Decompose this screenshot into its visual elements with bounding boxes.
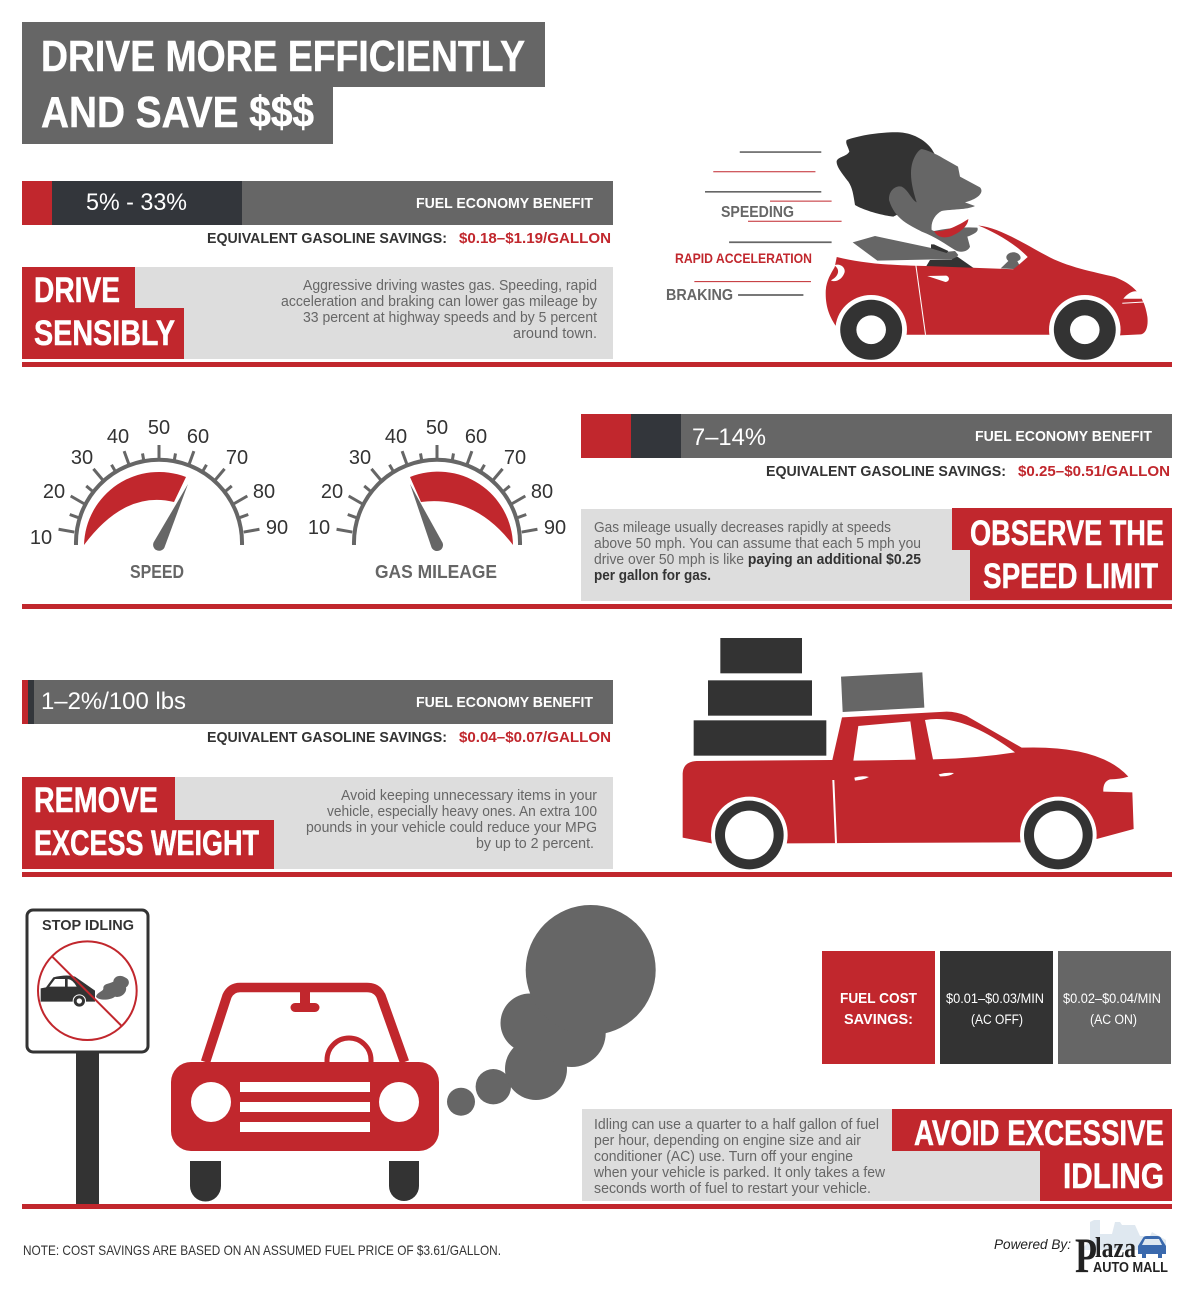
text panel: observe the speed limit: SPEED LIMIT	[983, 557, 1158, 596]
text panel: observe the speed limit: per gallon for gas.	[594, 568, 711, 584]
gasoline savings line: $0.18–$1.19/GALLON	[459, 230, 611, 247]
title: DRIVE MORE EFFICIENTLY	[41, 32, 525, 81]
windshield frame	[206, 988, 404, 1062]
chart: speed gauge: 40	[107, 426, 129, 448]
text panel: remove excess weight: vehicle, especially heavy ones. An extra 100	[327, 804, 597, 820]
value: AC on: $0.02–$0.04/MIN	[1063, 991, 1161, 1006]
text panel: avoid excessive idling: per hour, depending on engine size and air	[594, 1133, 861, 1149]
icon: stop idling sign	[27, 910, 148, 1205]
title	[22, 22, 545, 144]
benefit bar: 7–14%: 7–14%	[692, 424, 766, 451]
benefit bar: 5% - 33%: FUEL ECONOMY BENEFIT	[416, 195, 593, 212]
gasoline savings line	[766, 463, 1170, 480]
driver tie and arm	[853, 236, 958, 261]
chart: gas mileage gauge: 70	[504, 447, 526, 469]
gasoline savings line	[207, 230, 611, 247]
front wheel	[1020, 797, 1097, 873]
driver tongue	[934, 219, 968, 237]
steering wheel	[327, 1038, 371, 1064]
headlight	[1122, 291, 1146, 304]
value: AC off: (AC OFF)	[971, 1012, 1023, 1027]
rear-view mirror	[290, 990, 320, 1012]
door line and handle	[916, 265, 926, 335]
text panel: drive sensibly: 33 percent at highway speeds and by 5 percent	[303, 310, 597, 326]
value: AC off	[940, 951, 1053, 1064]
chart: gas mileage gauge: 20	[321, 481, 343, 503]
luggage stack	[694, 638, 826, 756]
benefit bar: 5% - 33%	[22, 181, 613, 225]
driver face	[889, 149, 981, 252]
chart: gas mileage gauge	[308, 417, 566, 582]
rear wheel	[711, 797, 788, 873]
value: AC off: $0.01–$0.03/MIN	[946, 991, 1044, 1006]
car body	[171, 1062, 439, 1151]
chart: speed gauge	[30, 417, 288, 582]
gasoline savings line: $0.25–$0.51/GALLON	[1018, 463, 1170, 480]
gasoline savings line	[207, 729, 611, 746]
label: fuel cost savings: SAVINGS:	[844, 1011, 913, 1028]
truck body	[683, 712, 1134, 843]
chart: gas mileage gauge: 50	[426, 417, 448, 439]
chart: gas mileage gauge: GAS MILEAGE	[375, 562, 497, 582]
title: AND SAVE $$$	[41, 88, 314, 137]
chart: gas mileage gauge: 80	[531, 481, 553, 503]
panel: drive sensibly	[22, 181, 613, 359]
chart: gas mileage gauge: 60	[465, 426, 487, 448]
chart: gas mileage gauge: 90	[544, 517, 566, 539]
text panel: observe the speed limit: above 50 mph. You can assume that each 5 mph you	[594, 536, 921, 552]
truck door line and handles	[833, 780, 836, 843]
logo: powered by Plaza Auto Mall: P	[1075, 1227, 1097, 1283]
chart: gas mileage gauge: 30	[349, 447, 371, 469]
gasoline savings line: EQUIVALENT GASOLINE SAVINGS:	[207, 729, 447, 746]
skyline	[1083, 1220, 1166, 1250]
driver hand	[1001, 252, 1022, 270]
icon: exhaust smoke	[447, 905, 656, 1116]
panel: remove excess weight	[22, 680, 613, 869]
speed lines and labels: SPEEDING	[721, 204, 794, 221]
text panel: avoid excessive idling: when your vehicle is parked. It only takes a few	[593, 1165, 886, 1181]
label: fuel cost savings: FUEL COST	[840, 990, 917, 1007]
car icon	[1138, 1236, 1166, 1258]
gasoline savings line: EQUIVALENT GASOLINE SAVINGS:	[766, 463, 1006, 480]
driver hair	[837, 132, 953, 217]
text panel: remove excess weight: Avoid keeping unnecessary items in your	[341, 788, 597, 804]
text panel: drive sensibly: DRIVE	[34, 271, 120, 310]
text panel: remove excess weight	[22, 777, 613, 869]
roof luggage	[841, 672, 924, 712]
value: AC on: (AC ON)	[1090, 1012, 1137, 1027]
headlights	[191, 1082, 419, 1122]
text panel: observe the speed limit	[581, 508, 1172, 601]
speed lines and labels: BRAKING	[666, 287, 733, 304]
benefit bar: 1–2%/100 lbs: 1–2%/100 lbs	[41, 688, 186, 715]
chart: speed gauge: 90	[266, 517, 288, 539]
logo: powered by Plaza Auto Mall: AUTO MALL	[1093, 1260, 1168, 1276]
benefit bar: 1–2%/100 lbs: FUEL ECONOMY BENEFIT	[416, 694, 593, 711]
text panel: observe the speed limit: Gas mileage usually decreases rapidly at speeds	[594, 520, 891, 536]
text panel: avoid excessive idling: IDLING	[1063, 1157, 1164, 1196]
fuel cost savings table	[822, 951, 1171, 1064]
text panel: avoid excessive idling: conditioner (AC) use. Turn off your engine	[594, 1149, 853, 1165]
text panel: avoid excessive idling	[582, 1109, 1172, 1201]
text panel: avoid excessive idling: seconds worth of fuel to restart your vehicle.	[594, 1181, 871, 1197]
text panel: remove excess weight: pounds in your vehicle could reduce your MPG	[306, 820, 597, 836]
text panel: avoid excessive idling: Idling can use a quarter to a half gallon of fuel	[594, 1117, 879, 1133]
chart: speed gauge: 70	[226, 447, 248, 469]
benefit bar: 1–2%/100 lbs	[22, 680, 613, 724]
chart: speed gauge: 60	[187, 426, 209, 448]
chart: gas mileage gauge: 40	[385, 426, 407, 448]
chart: speed gauge: 20	[43, 481, 65, 503]
text panel: remove excess weight: by up to 2 percent.	[476, 836, 594, 852]
gasoline savings line: EQUIVALENT GASOLINE SAVINGS:	[207, 230, 447, 247]
truck windows	[853, 719, 1015, 761]
icon: loaded pickup truck	[683, 638, 1134, 873]
text panel: observe the speed limit: drive over 50 mph is like paying an additional $0.25	[594, 552, 921, 568]
gasoline savings line: $0.04–$0.07/GALLON	[459, 729, 611, 746]
front wheel	[1049, 295, 1121, 364]
grille	[240, 1082, 370, 1132]
icon: convertible car with driver	[826, 132, 1148, 364]
rear notch	[831, 265, 845, 281]
logo: powered by Plaza Auto Mall: laza	[1095, 1233, 1136, 1264]
text panel: remove excess weight: REMOVE	[34, 781, 158, 820]
benefit bar: 5% - 33%: 5% - 33%	[86, 189, 187, 216]
speed lines and labels	[666, 152, 842, 304]
logo: powered by Plaza Auto Mall: Powered By:	[994, 1237, 1071, 1252]
logo: powered by Plaza Auto Mall	[994, 1220, 1168, 1283]
chart: speed gauge: 10	[30, 527, 52, 549]
text panel: drive sensibly: SENSIBLY	[34, 314, 175, 353]
car body	[826, 226, 1148, 335]
chart: speed gauge: 80	[253, 481, 275, 503]
panel: observe the speed limit	[581, 414, 1172, 601]
driver	[837, 132, 1022, 270]
chart: speed gauge: SPEED	[130, 562, 184, 582]
value: AC on	[1058, 951, 1171, 1064]
speed lines and labels: RAPID ACCELERATION	[675, 250, 812, 266]
text panel: drive sensibly: around town.	[513, 326, 597, 342]
label: fuel cost savings	[822, 951, 935, 1064]
icon: front view of car	[171, 988, 439, 1202]
chart: gas mileage gauge: 10	[308, 517, 330, 539]
benefit bar: 7–14%	[581, 414, 1172, 458]
icon: stop idling sign: STOP IDLING	[42, 917, 134, 934]
text panel: drive sensibly	[22, 267, 613, 359]
chart: speed gauge: 50	[148, 417, 170, 439]
tires	[190, 1161, 419, 1202]
chart: speed gauge: 30	[71, 447, 93, 469]
text panel: drive sensibly: acceleration and braking can lower gas mileage by	[281, 294, 598, 310]
rear wheel	[835, 295, 907, 364]
text panel: drive sensibly: Aggressive driving wastes gas. Speeding, rapid	[303, 278, 597, 294]
footnote: NOTE: COST SAVINGS ARE BASED ON AN ASSUMED FUEL PRICE OF $3.61/GALLON.	[23, 1242, 501, 1258]
text panel: remove excess weight: EXCESS WEIGHT	[34, 824, 259, 863]
benefit bar: 7–14%: FUEL ECONOMY BENEFIT	[975, 428, 1152, 445]
